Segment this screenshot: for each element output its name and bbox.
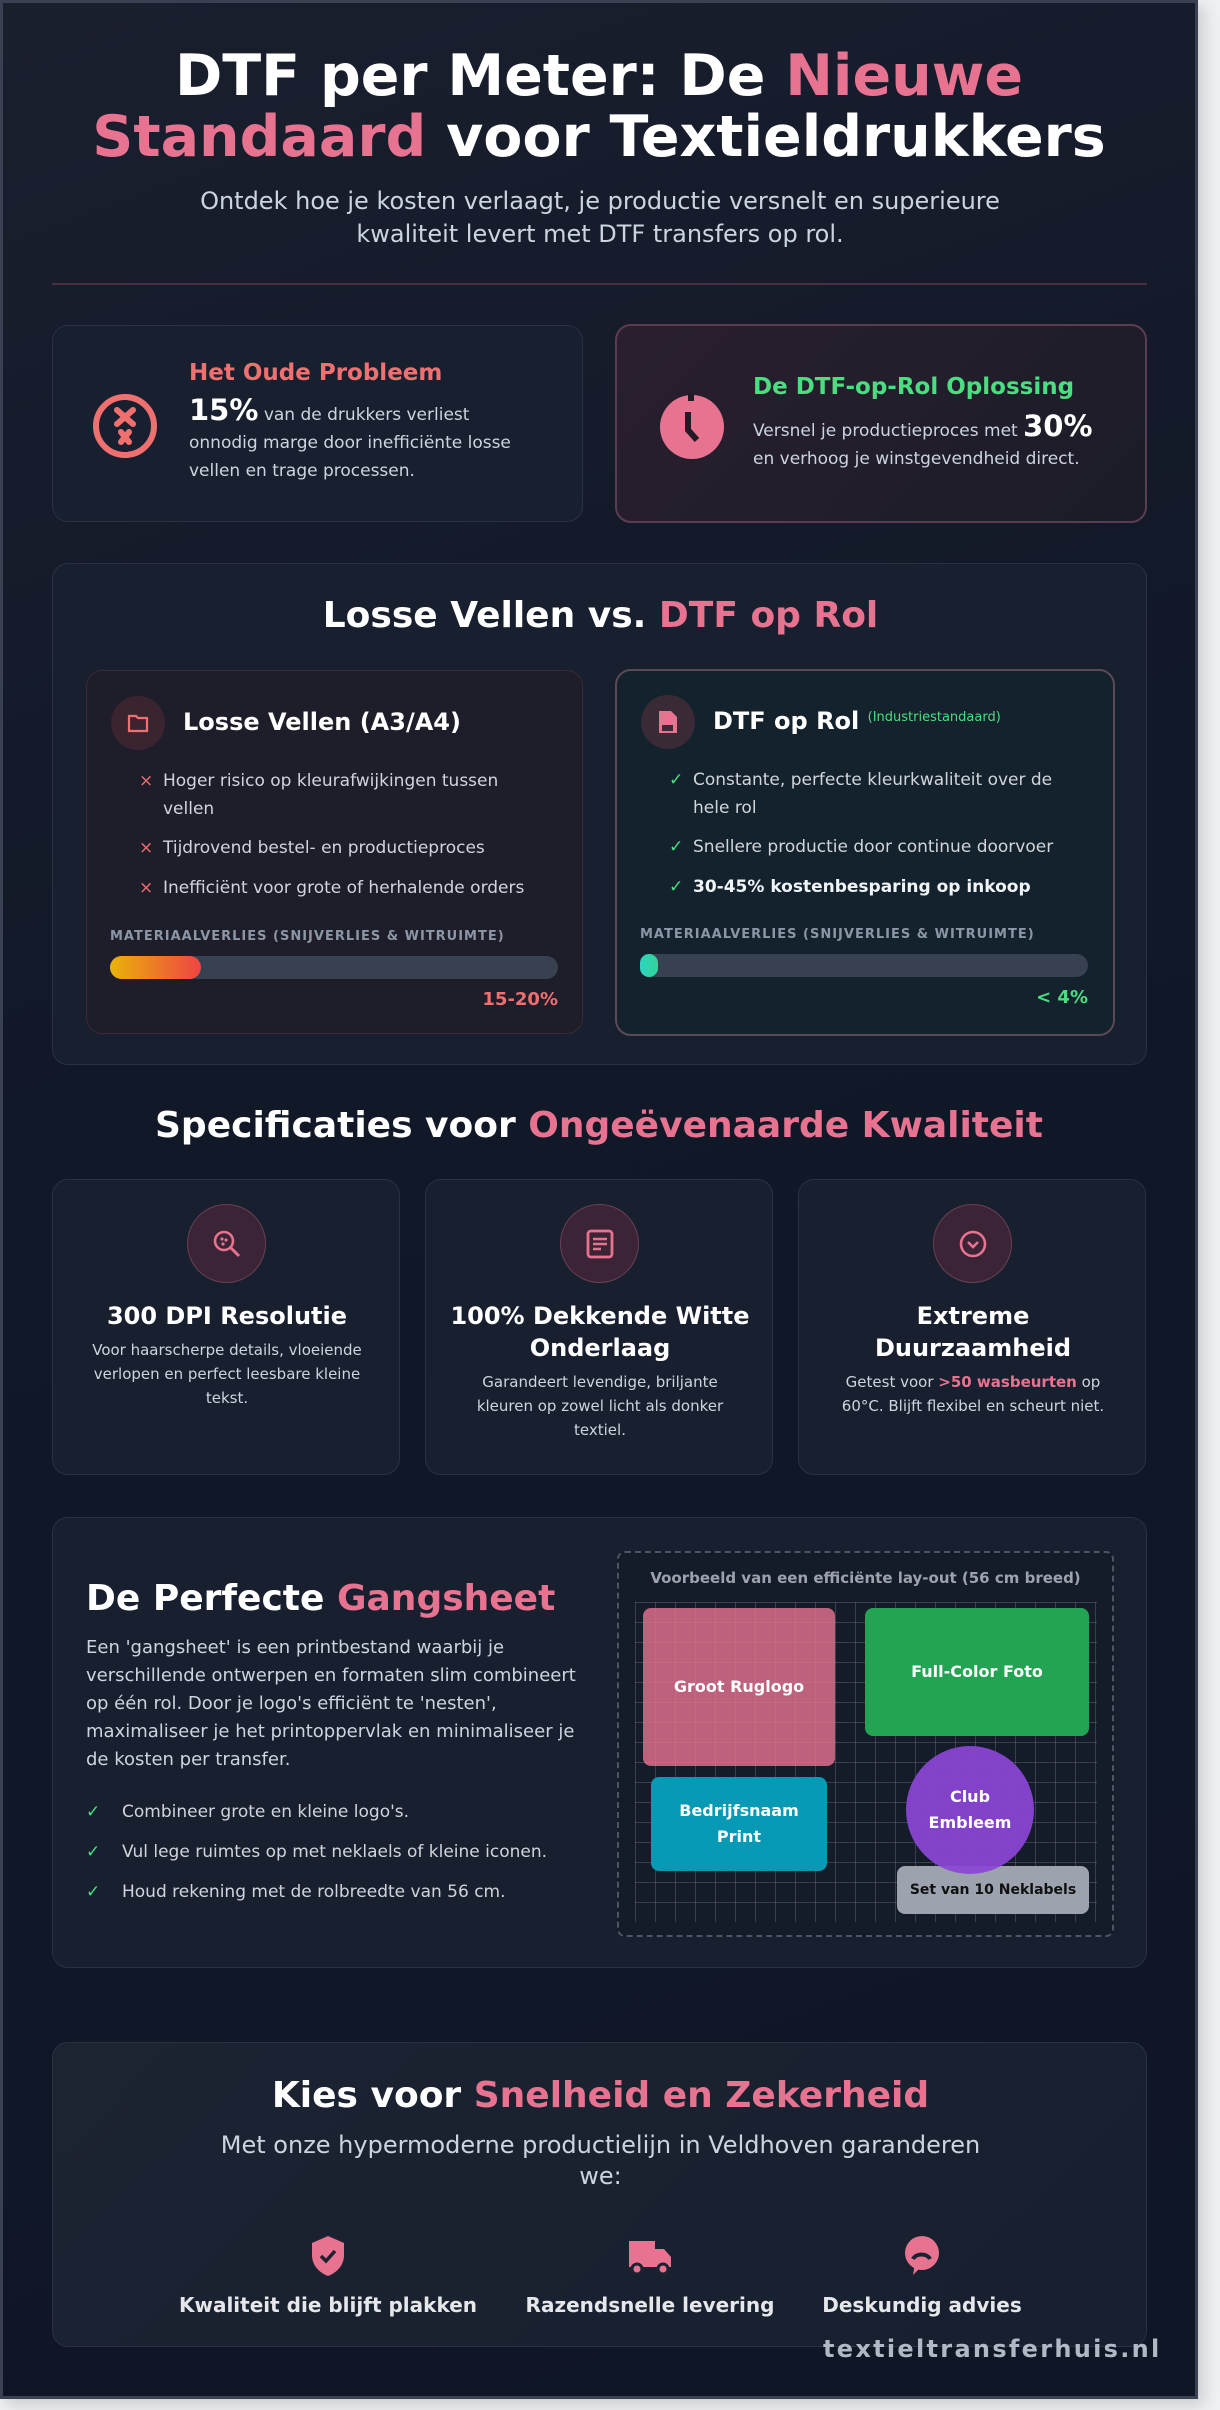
item: advice: Deskundig advies [822,2293,1022,2317]
title: Standaard voor Textieldrukkers [92,104,1106,170]
list: pros [669,770,1054,897]
sub-panel: dtf op rol: 30-45% kostenbesparing op inkoop [693,877,1031,897]
text: 15%: 15% van de drukkers verliest onnodig marge door inefficiënte losse vellen en trage processen. [189,393,511,481]
list: tips: ✓ [86,1842,100,1862]
panel: comparison [52,563,1147,1065]
heading: 100% Dekkende Witte Onderlaag [450,1302,750,1362]
item: quality: Kwaliteit die blijft plakken [179,2293,477,2317]
sub-panel: losse vellen: Inefficiënt voor grote of herhalende orders [163,878,524,898]
sub-panel: dtf op rol [615,669,1115,1036]
box: groot ruglogo [643,1608,835,1766]
grid [635,1602,1097,1922]
bar: material loss sheets: MATERIAALVERLIES (SNIJVERLIES & WITRUIMTE) [110,929,505,944]
heading: Extreme [917,1302,1029,1330]
icon: roll [641,695,695,749]
list: tips [86,1802,547,1902]
heading: 300 DPI Resolutie [107,1302,347,1330]
sub-panel: losse vellen: Hoger risico op kleurafwijkingen tussen vellen [163,771,498,819]
sub-panel: losse vellen: Tijdrovend bestel- en productieproces [163,838,485,858]
sub-panel: dtf op rol: ✓ [669,770,683,790]
text: Garandeert levendige, briljante kleuren op zowel licht als donker textiel. [477,1373,723,1439]
heading [875,1302,1071,1362]
bar: material loss roll: < 4% [1036,987,1088,1008]
box: bedrijfsnaam [651,1777,827,1871]
list: tips: ✓ [86,1882,100,1902]
list: tips: Houd rekening met de rolbreedte van 56 cm. [122,1882,506,1902]
box: neklabels: Set van 10 Neklabels [910,1882,1076,1898]
list: tips: ✓ [86,1802,100,1822]
panel: solution [615,324,1147,523]
title: DTF per Meter: De Nieuwe [175,43,1023,109]
item: quality [179,2236,477,2317]
icon: folder [111,696,165,750]
icon: shield [312,2236,344,2276]
heading: dtf op rol: DTF op Rol (Industriestandaard) [713,707,1001,735]
text: 30%: Versnel je productieproces met 30% en verhoog je winstgevendheid direct. [753,409,1093,469]
panel: spec 300 dpi [52,1179,400,1475]
footer: brand: textieltransferhuis.nl [823,2335,1162,2363]
sub-panel: losse vellen [86,670,583,1034]
chart: layout example [617,1551,1114,1937]
bar: material loss sheets [110,929,558,1010]
icon: magnifier [187,1204,266,1283]
text: Voor haarscherpe details, vloeiende verlopen en perfect leesbare kleine tekst. [92,1341,362,1407]
heading: gangsheet: De Perfecte Gangsheet [86,1578,555,1619]
box: club embleem: Club [950,1787,990,1806]
subtitle: Met onze hypermoderne productielijn in Veldhoven garanderen we: [221,2131,980,2190]
icon: advice [905,2236,939,2275]
heading: Kies voor Snelheid en Zekerheid [272,2075,929,2116]
icon: document [560,1204,639,1283]
box: neklabels [897,1866,1089,1914]
list: cons [139,771,524,898]
icon: problem [93,394,157,458]
box: club embleem [906,1746,1034,1874]
text: Getest voor >50 wasbeurten op 60°C. Blijft flexibel en scheurt niet. [842,1373,1104,1415]
box: club embleem: Embleem [929,1813,1011,1832]
sub-panel: losse vellen: × [139,771,153,791]
icon: check circle [933,1204,1012,1283]
list: tips: Vul lege ruimtes op met neklaels of kleine iconen. [122,1842,547,1862]
sub-panel: dtf op rol: ✓ [669,877,683,897]
item: advice [822,2236,1022,2317]
sub-panel: losse vellen: × [139,878,153,898]
heading: comparison: Losse Vellen vs. DTF op Rol [323,595,878,636]
heading: old problem: Het Oude Probleem [189,360,442,386]
caption: Voorbeeld van een efficiënte lay-out (56 cm breed) [650,1569,1081,1587]
text: gangsheet explanation: Een 'gangsheet' is een printbestand waarbij je verschillende ontwerpen en formaten slim combineert op één rol. Door je logo's efficiënt te 'nesten', maximaliseer je het printoppervlak en minimaliseer je de kosten per transfer. [86,1637,576,1770]
box: bedrijfsnaam: Print [717,1827,761,1846]
panel: gangsheet [52,1517,1147,1968]
item: delivery: Razendsnelle levering [526,2293,774,2317]
panel: spec durability [798,1179,1146,1475]
heading: specs: Specificaties voor Ongeëvenaarde Kwaliteit [155,1105,1043,1146]
box: bedrijfsnaam: Bedrijfsnaam [679,1801,799,1820]
sub-panel: losse vellen: × [139,838,153,858]
box: full-color foto [865,1608,1089,1736]
heading: solution: De DTF-op-Rol Oplossing [753,374,1074,400]
heading: Duurzaamheid [875,1334,1071,1362]
bar: material loss roll [640,927,1088,1008]
icon: clock [660,395,724,459]
bar: material loss roll: MATERIAALVERLIES (SNIJVERLIES & WITRUIMTE) [640,927,1035,942]
sub-panel: dtf op rol: Snellere productie door continue doorvoer [693,837,1053,857]
heading: losse vellen: Losse Vellen (A3/A4) [183,708,461,736]
list: tips: Combineer grote en kleine logo's. [122,1802,409,1822]
sub-panel: dtf op rol: ✓ [669,837,683,857]
bar: material loss sheets: 15-20% [482,989,558,1010]
sub-panel: dtf op rol: Constante, perfecte kleurkwaliteit over de hele rol [693,770,1052,818]
subtitle: Ontdek hoe je kosten verlaagt, je productie versnelt en superieure kwaliteit levert met DTF transfers op rol. [200,187,1000,248]
item: delivery [526,2241,774,2317]
panel: speed and certainty [52,2042,1147,2347]
icon: truck [629,2241,671,2272]
panel: old problem [52,325,583,522]
box: groot ruglogo: Groot Ruglogo [674,1677,804,1696]
panel: spec white underlayer [425,1179,773,1475]
box: full-color foto: Full-Color Foto [911,1662,1043,1681]
title [92,43,1106,170]
